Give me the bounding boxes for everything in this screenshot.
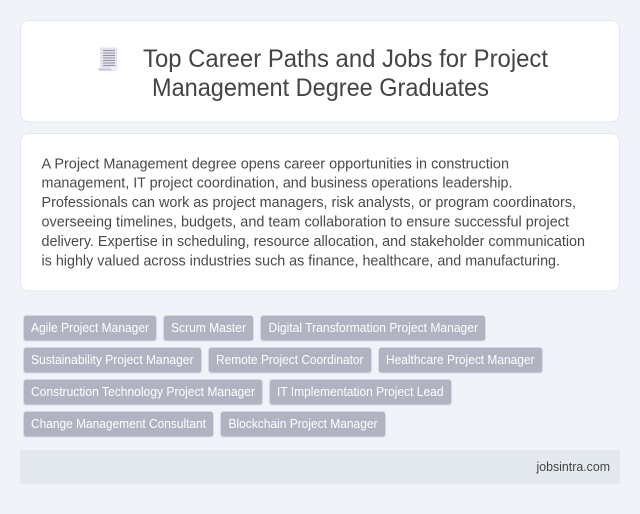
tag: Change Management Consultant xyxy=(24,412,214,437)
tag: Blockchain Project Manager: Blockchain Project Manager xyxy=(228,417,378,431)
description text: Professionals can work as project managers, risk analysts, or program coordinators, xyxy=(42,194,576,211)
description text: delivery. Expertise in scheduling, resource allocation, and stakeholder communication xyxy=(42,233,585,250)
footer site name: jobsintra.com xyxy=(536,460,610,474)
tag: Scrum Master xyxy=(164,316,254,341)
tag: Healthcare Project Manager: Healthcare Project Manager xyxy=(386,353,534,367)
tag: Sustainability Project Manager: Sustainability Project Manager xyxy=(31,353,194,367)
description text: A Project Management degree opens career opportunities in construction xyxy=(42,155,509,172)
title: Top Career Paths and Jobs for Project xyxy=(143,45,548,73)
tag: Agile Project Manager xyxy=(24,316,156,341)
tag: Change Management Consultant: Change Management Consultant xyxy=(31,417,206,431)
description text xyxy=(42,155,585,270)
panel: title header xyxy=(20,20,620,122)
title: Management Degree Graduates xyxy=(152,74,489,102)
tag: Agile Project Manager: Agile Project Manager xyxy=(31,321,149,335)
tag: Construction Technology Project Manager xyxy=(24,380,262,405)
tag: Remote Project Coordinator xyxy=(208,348,372,373)
tag: Digital Transformation Project Manager xyxy=(260,316,486,341)
tag: Remote Project Coordinator: Remote Project Coordinator xyxy=(216,353,364,367)
tag: Healthcare Project Manager xyxy=(378,348,542,373)
description text: overseeing timelines, budgets, and team collaboration to ensure successful project xyxy=(42,214,570,231)
description text: management, IT project coordination, and business operations leadership. xyxy=(42,175,512,192)
tag: Blockchain Project Manager xyxy=(220,412,386,437)
tag: Sustainability Project Manager xyxy=(24,348,202,373)
description text: is highly valued across industries such as finance, healthcare, and manufacturing. xyxy=(42,252,560,270)
tag: IT Implementation Project Lead xyxy=(270,380,452,405)
tag: Construction Technology Project Manager: Construction Technology Project Manager xyxy=(31,385,255,399)
tag: Scrum Master: Scrum Master xyxy=(171,321,246,335)
job tags xyxy=(24,316,542,437)
icon: document scroll xyxy=(98,47,117,71)
panel: description xyxy=(20,134,620,291)
title xyxy=(143,45,548,102)
tag: Digital Transformation Project Manager: Digital Transformation Project Manager xyxy=(268,321,478,335)
footer bar xyxy=(20,450,620,484)
tag: IT Implementation Project Lead: IT Implementation Project Lead xyxy=(277,385,444,399)
